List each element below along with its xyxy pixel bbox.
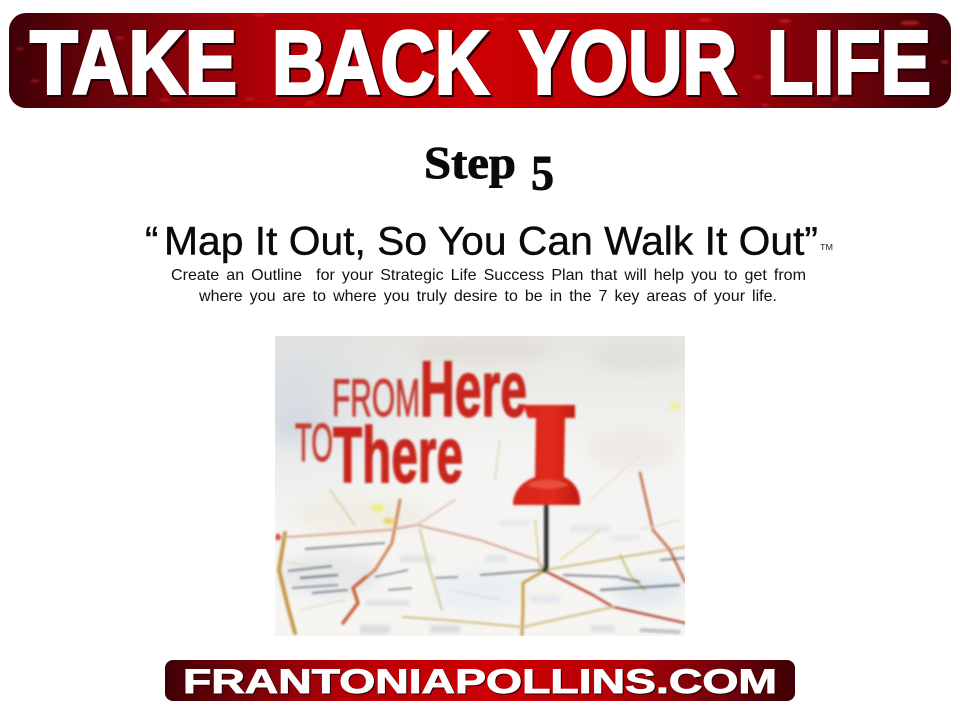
- banner title text: LIFE: [767, 14, 931, 114]
- banner title text: YOUR: [519, 14, 737, 114]
- map background tint patches: [270, 338, 690, 612]
- subtitle: slogan: Map It Out, So You Can Walk It Out”: [164, 220, 818, 264]
- banner title text: TAKE: [30, 14, 237, 114]
- map yellow highlights: [372, 402, 681, 524]
- description text: [171, 267, 806, 305]
- photo caption: from here to there: Here: [420, 344, 527, 433]
- icon: push pin: [513, 405, 580, 572]
- footer banner: website: [165, 660, 795, 701]
- heading: step 5: Step: [424, 138, 516, 188]
- banner title text: BACK: [272, 14, 489, 114]
- heading: step 5: [424, 138, 554, 200]
- photo caption: from here to there: FROM: [332, 369, 420, 428]
- trademark mark: TM: [820, 242, 833, 252]
- banner title text: [30, 14, 931, 114]
- banner: take back your life: [9, 13, 951, 114]
- subtitle: slogan: “: [145, 220, 158, 264]
- description text: where you are to where you truly desire to be in the 7 key areas of your life.: [198, 288, 777, 305]
- photo caption: from here to there: There: [333, 410, 463, 499]
- heading: step 5: 5: [531, 144, 554, 200]
- photo caption: from here to there: TO: [295, 413, 333, 473]
- photo: map with red push pin: [270, 336, 690, 636]
- map roads: [275, 440, 685, 635]
- description text: Create an Outline for your Strategic Life Success Plan that will help you to get from: [171, 267, 806, 284]
- footer website text: FRANTONIAPOLLINS.COM: [183, 663, 777, 701]
- photo caption: from here to there: [294, 359, 528, 486]
- map place labels: [288, 543, 685, 632]
- map faint detail patches: [360, 520, 640, 634]
